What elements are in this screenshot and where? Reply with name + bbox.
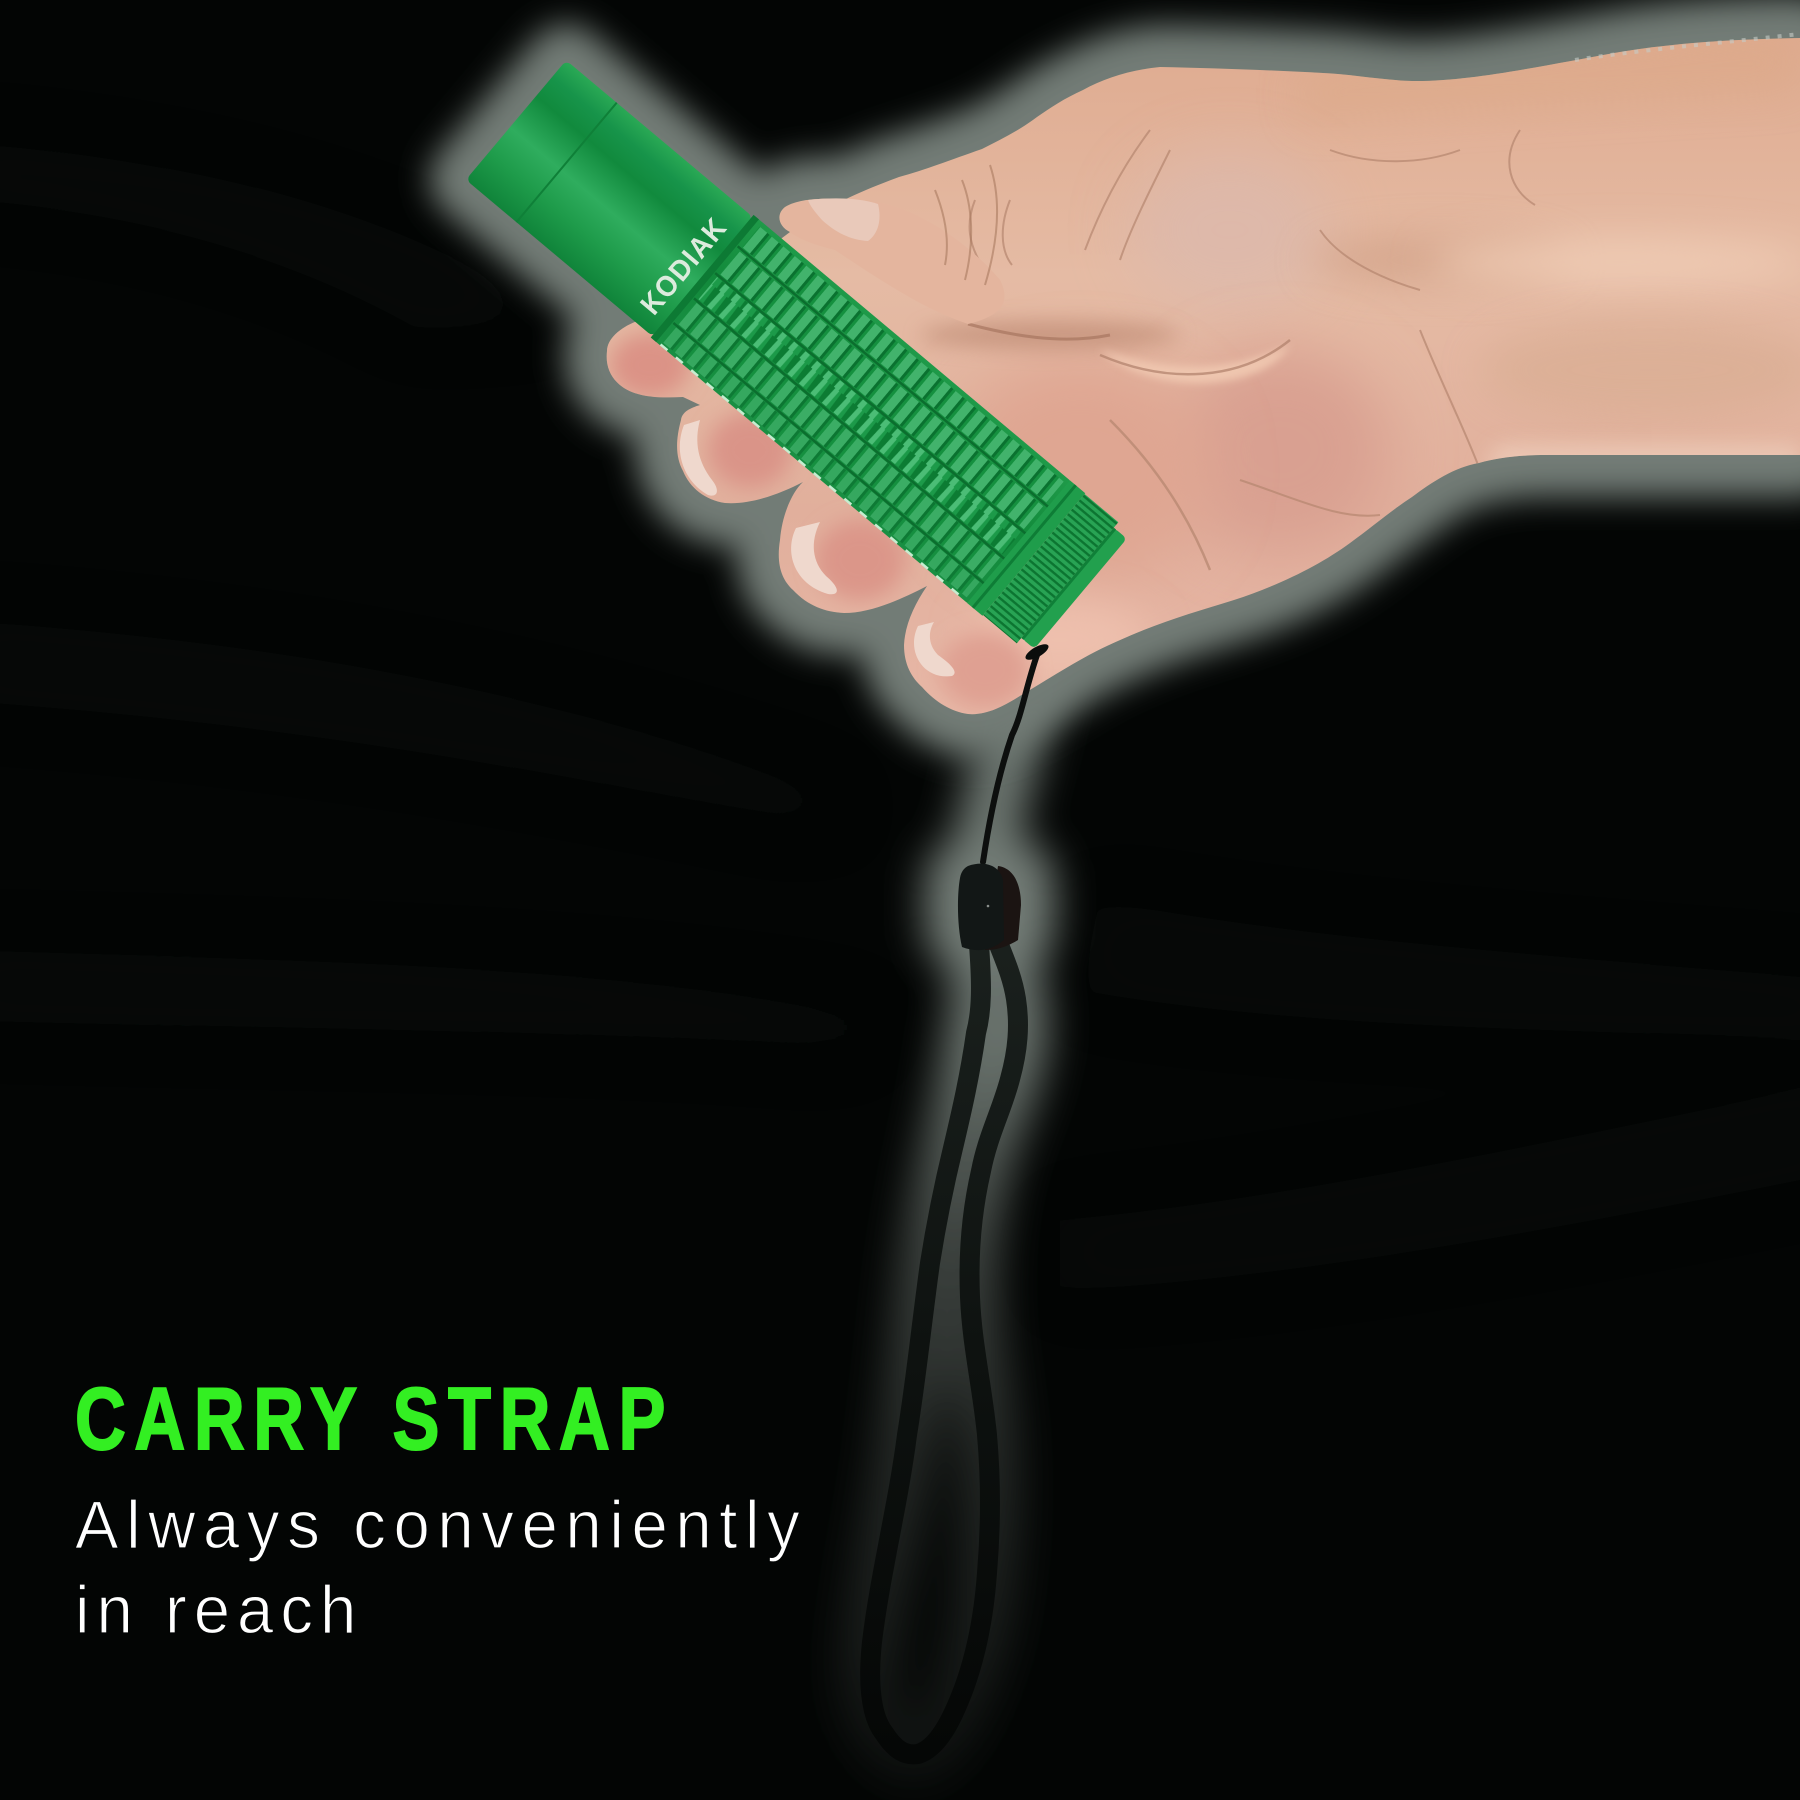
- palm shading: [920, 321, 1390, 680]
- hand and flashlight glow halo: [463, 38, 1800, 714]
- skin creases: [968, 130, 1535, 570]
- hand and forearm: [607, 30, 1800, 714]
- heading: carry strap: CARRY STRAP: [75, 1369, 665, 1468]
- flashlight knurled tail ring: [967, 480, 1132, 655]
- strap glow halo: [870, 650, 1055, 1754]
- subheading: always conveniently in reach: in reach: [75, 1573, 356, 1648]
- subheading: always conveniently in reach: [75, 1488, 800, 1648]
- fingers shading: [610, 333, 1030, 708]
- flashlight body: [465, 59, 1132, 655]
- flashlight brand logo: KODIAK: [635, 212, 734, 321]
- subheading: always conveniently in reach: Always conveniently: [75, 1488, 800, 1563]
- thumbnail: [808, 198, 880, 241]
- lanyard braided loop: [870, 945, 1018, 1754]
- flashlight textured grip: [651, 215, 1071, 604]
- flashlight head barrel: [466, 60, 753, 337]
- fingernails: [680, 420, 955, 676]
- arm edge fringe: [1575, 34, 1800, 60]
- lanyard thin cord: [983, 641, 1051, 862]
- lanyard slider bead: [958, 864, 1021, 950]
- back of hand shading: [1130, 30, 1800, 470]
- thumb over flashlight: [780, 165, 1005, 324]
